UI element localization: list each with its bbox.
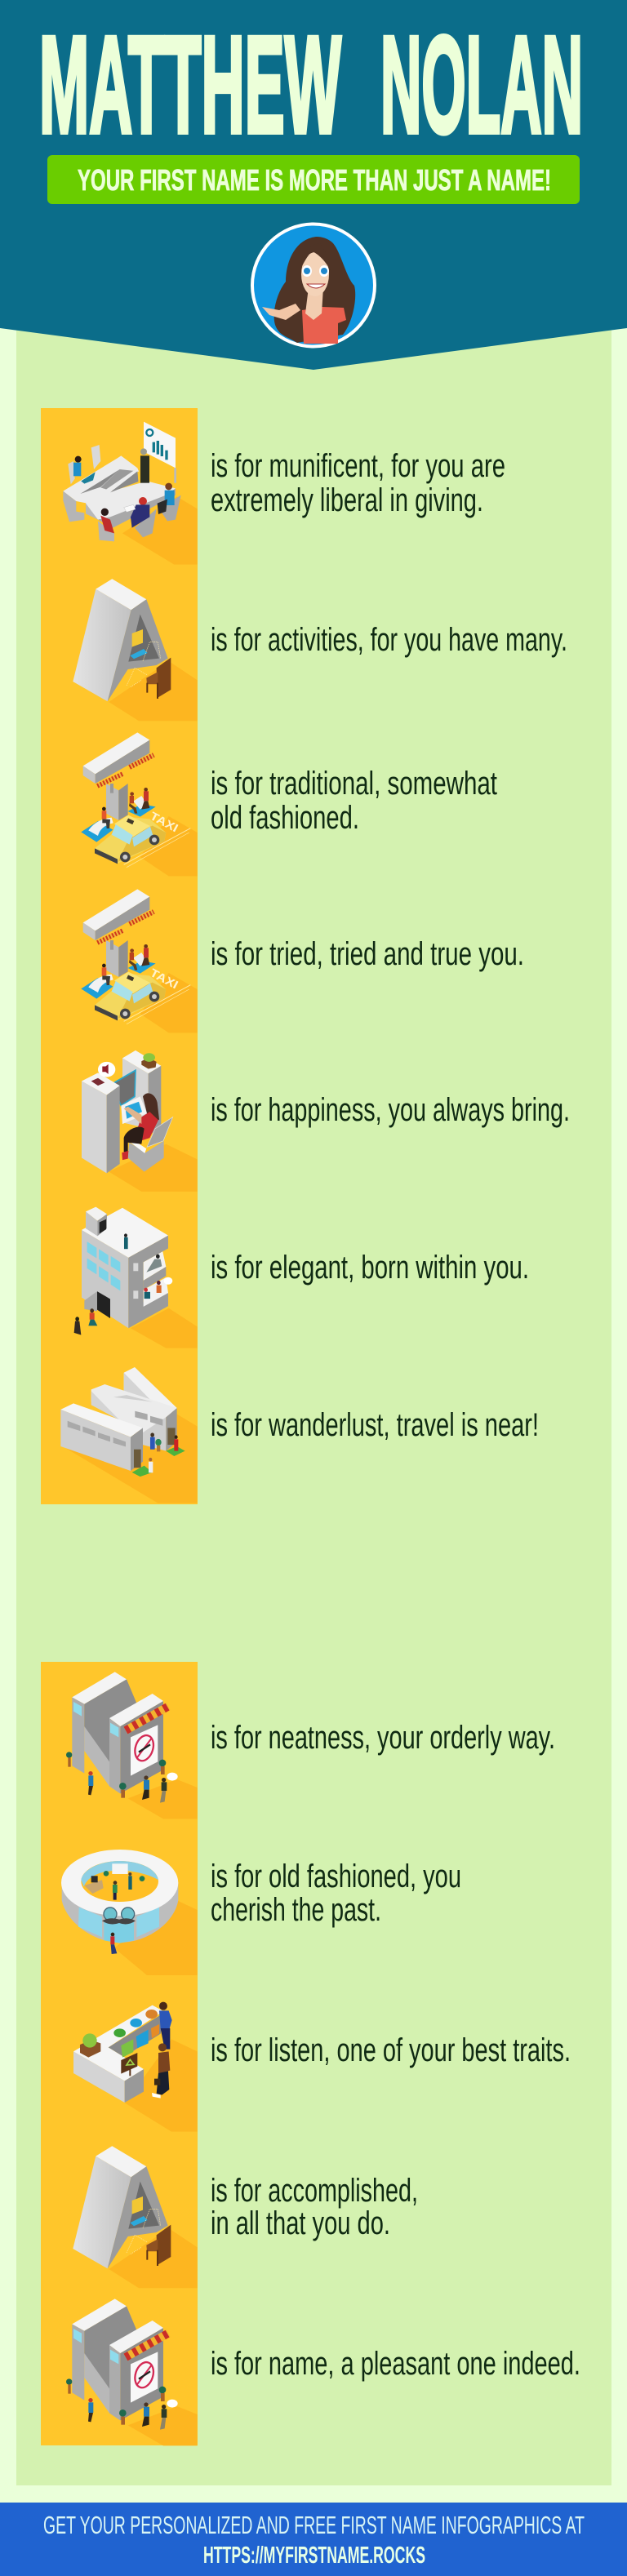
row text: T line 2: old fashioned. (211, 800, 359, 836)
row text: O: is for old fashioned, you (211, 1859, 461, 1894)
row text: T: is for traditional, somewhat (211, 766, 497, 802)
panel: last name letters (41, 1662, 198, 2445)
footer (0, 2503, 627, 2576)
avatar: woman in circle (251, 222, 376, 348)
icon: letter L recycling counter (73, 2002, 198, 2132)
row text: O line 2: cherish the past. (211, 1892, 381, 1928)
icon: letter T taxi stand repeat (81, 889, 198, 1033)
icon: letter N no smoking shop repeat (66, 2298, 198, 2445)
icon: letter O optician ring (61, 1850, 198, 1975)
icon: letter T taxi stand (81, 732, 198, 876)
row text: T second: is for tried, tried and true you. (211, 936, 524, 972)
panel: first name letters (41, 408, 198, 1504)
icon: letter E building (74, 1207, 198, 1348)
header chevron (0, 0, 627, 370)
icon: letter W block (60, 1367, 198, 1503)
label: taxi: TAXI (148, 809, 180, 835)
icon: letter A with chair repeat (73, 2146, 198, 2288)
subtitle banner (47, 155, 580, 204)
row text: M: is for munificent, for you are (211, 448, 505, 484)
icon: letter A with chair (73, 579, 198, 721)
label: taxi repeat: TAXI (148, 966, 180, 992)
icon: letter N no smoking shop (66, 1672, 198, 1819)
row text: A line 2: in all that you do. (211, 2205, 390, 2241)
footer url: HTTPS://MYFIRSTNAME.ROCKS (203, 2543, 425, 2569)
row text: M line 2: extremely liberal in giving. (211, 482, 483, 518)
row text: A: is for accomplished, (211, 2173, 418, 2209)
icon: letter H workstation (82, 1050, 198, 1192)
icon: letter M meeting table (63, 422, 198, 565)
